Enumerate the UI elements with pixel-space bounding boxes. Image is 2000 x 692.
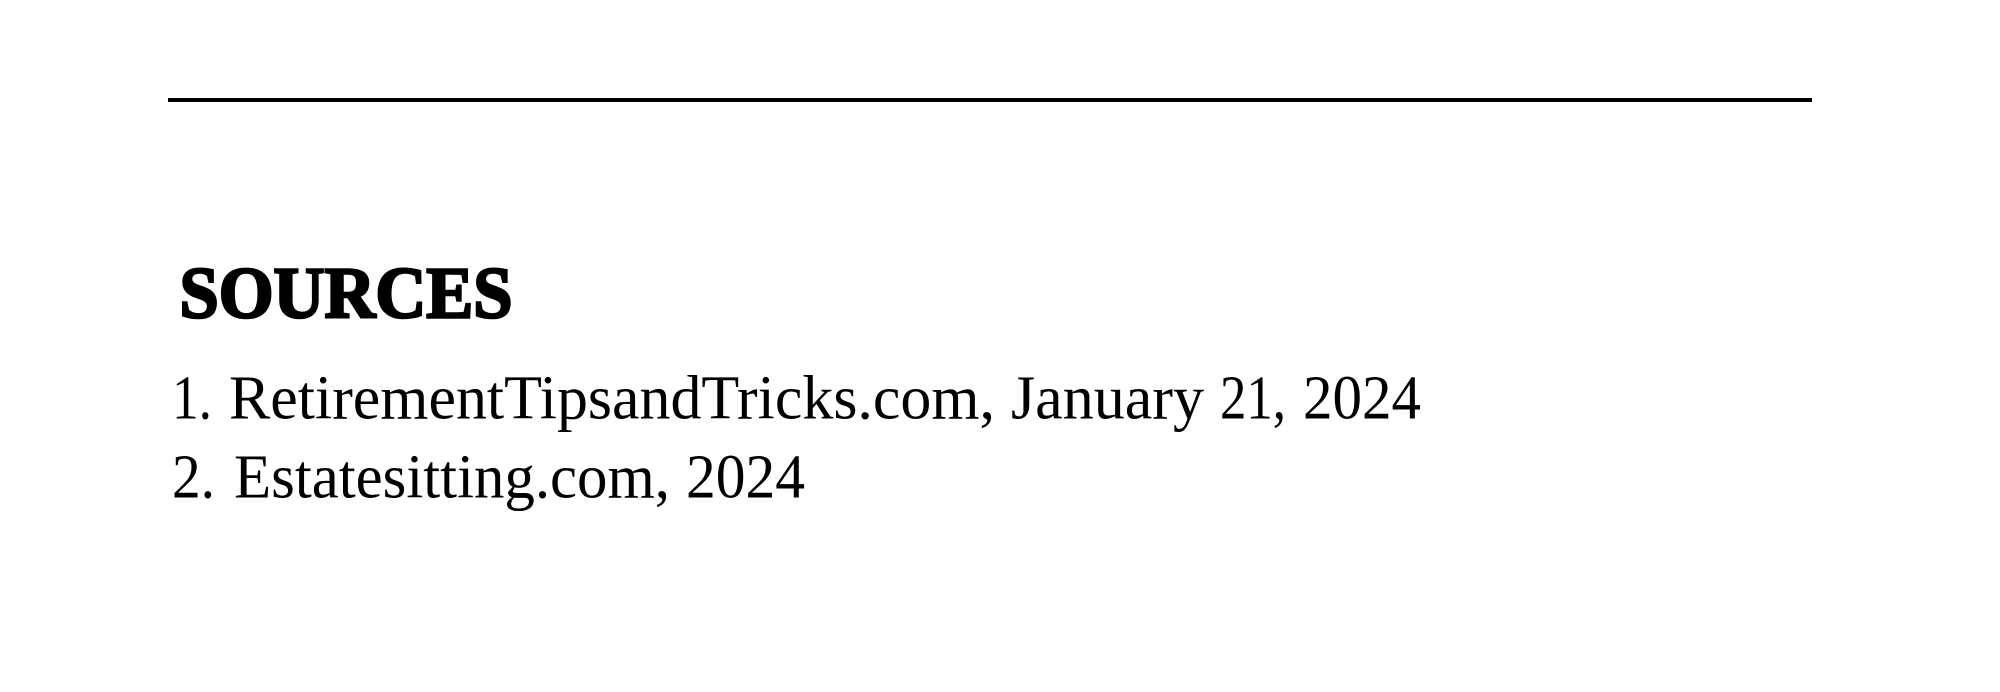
source 2: 2024 xyxy=(686,444,805,512)
source 2: 2. xyxy=(172,444,215,512)
source 1: January xyxy=(1011,364,1204,432)
source 1: 21, xyxy=(1220,364,1286,432)
source 1: RetirementTipsandTricks.com, xyxy=(229,364,995,432)
top divider rule xyxy=(168,98,1812,102)
source 1: 2024 xyxy=(1303,364,1421,432)
source list xyxy=(172,364,1421,512)
source 2: Estatesitting.com, xyxy=(234,444,670,512)
source 1: 1. xyxy=(172,364,212,432)
heading: sources: SOURCES xyxy=(180,252,512,334)
